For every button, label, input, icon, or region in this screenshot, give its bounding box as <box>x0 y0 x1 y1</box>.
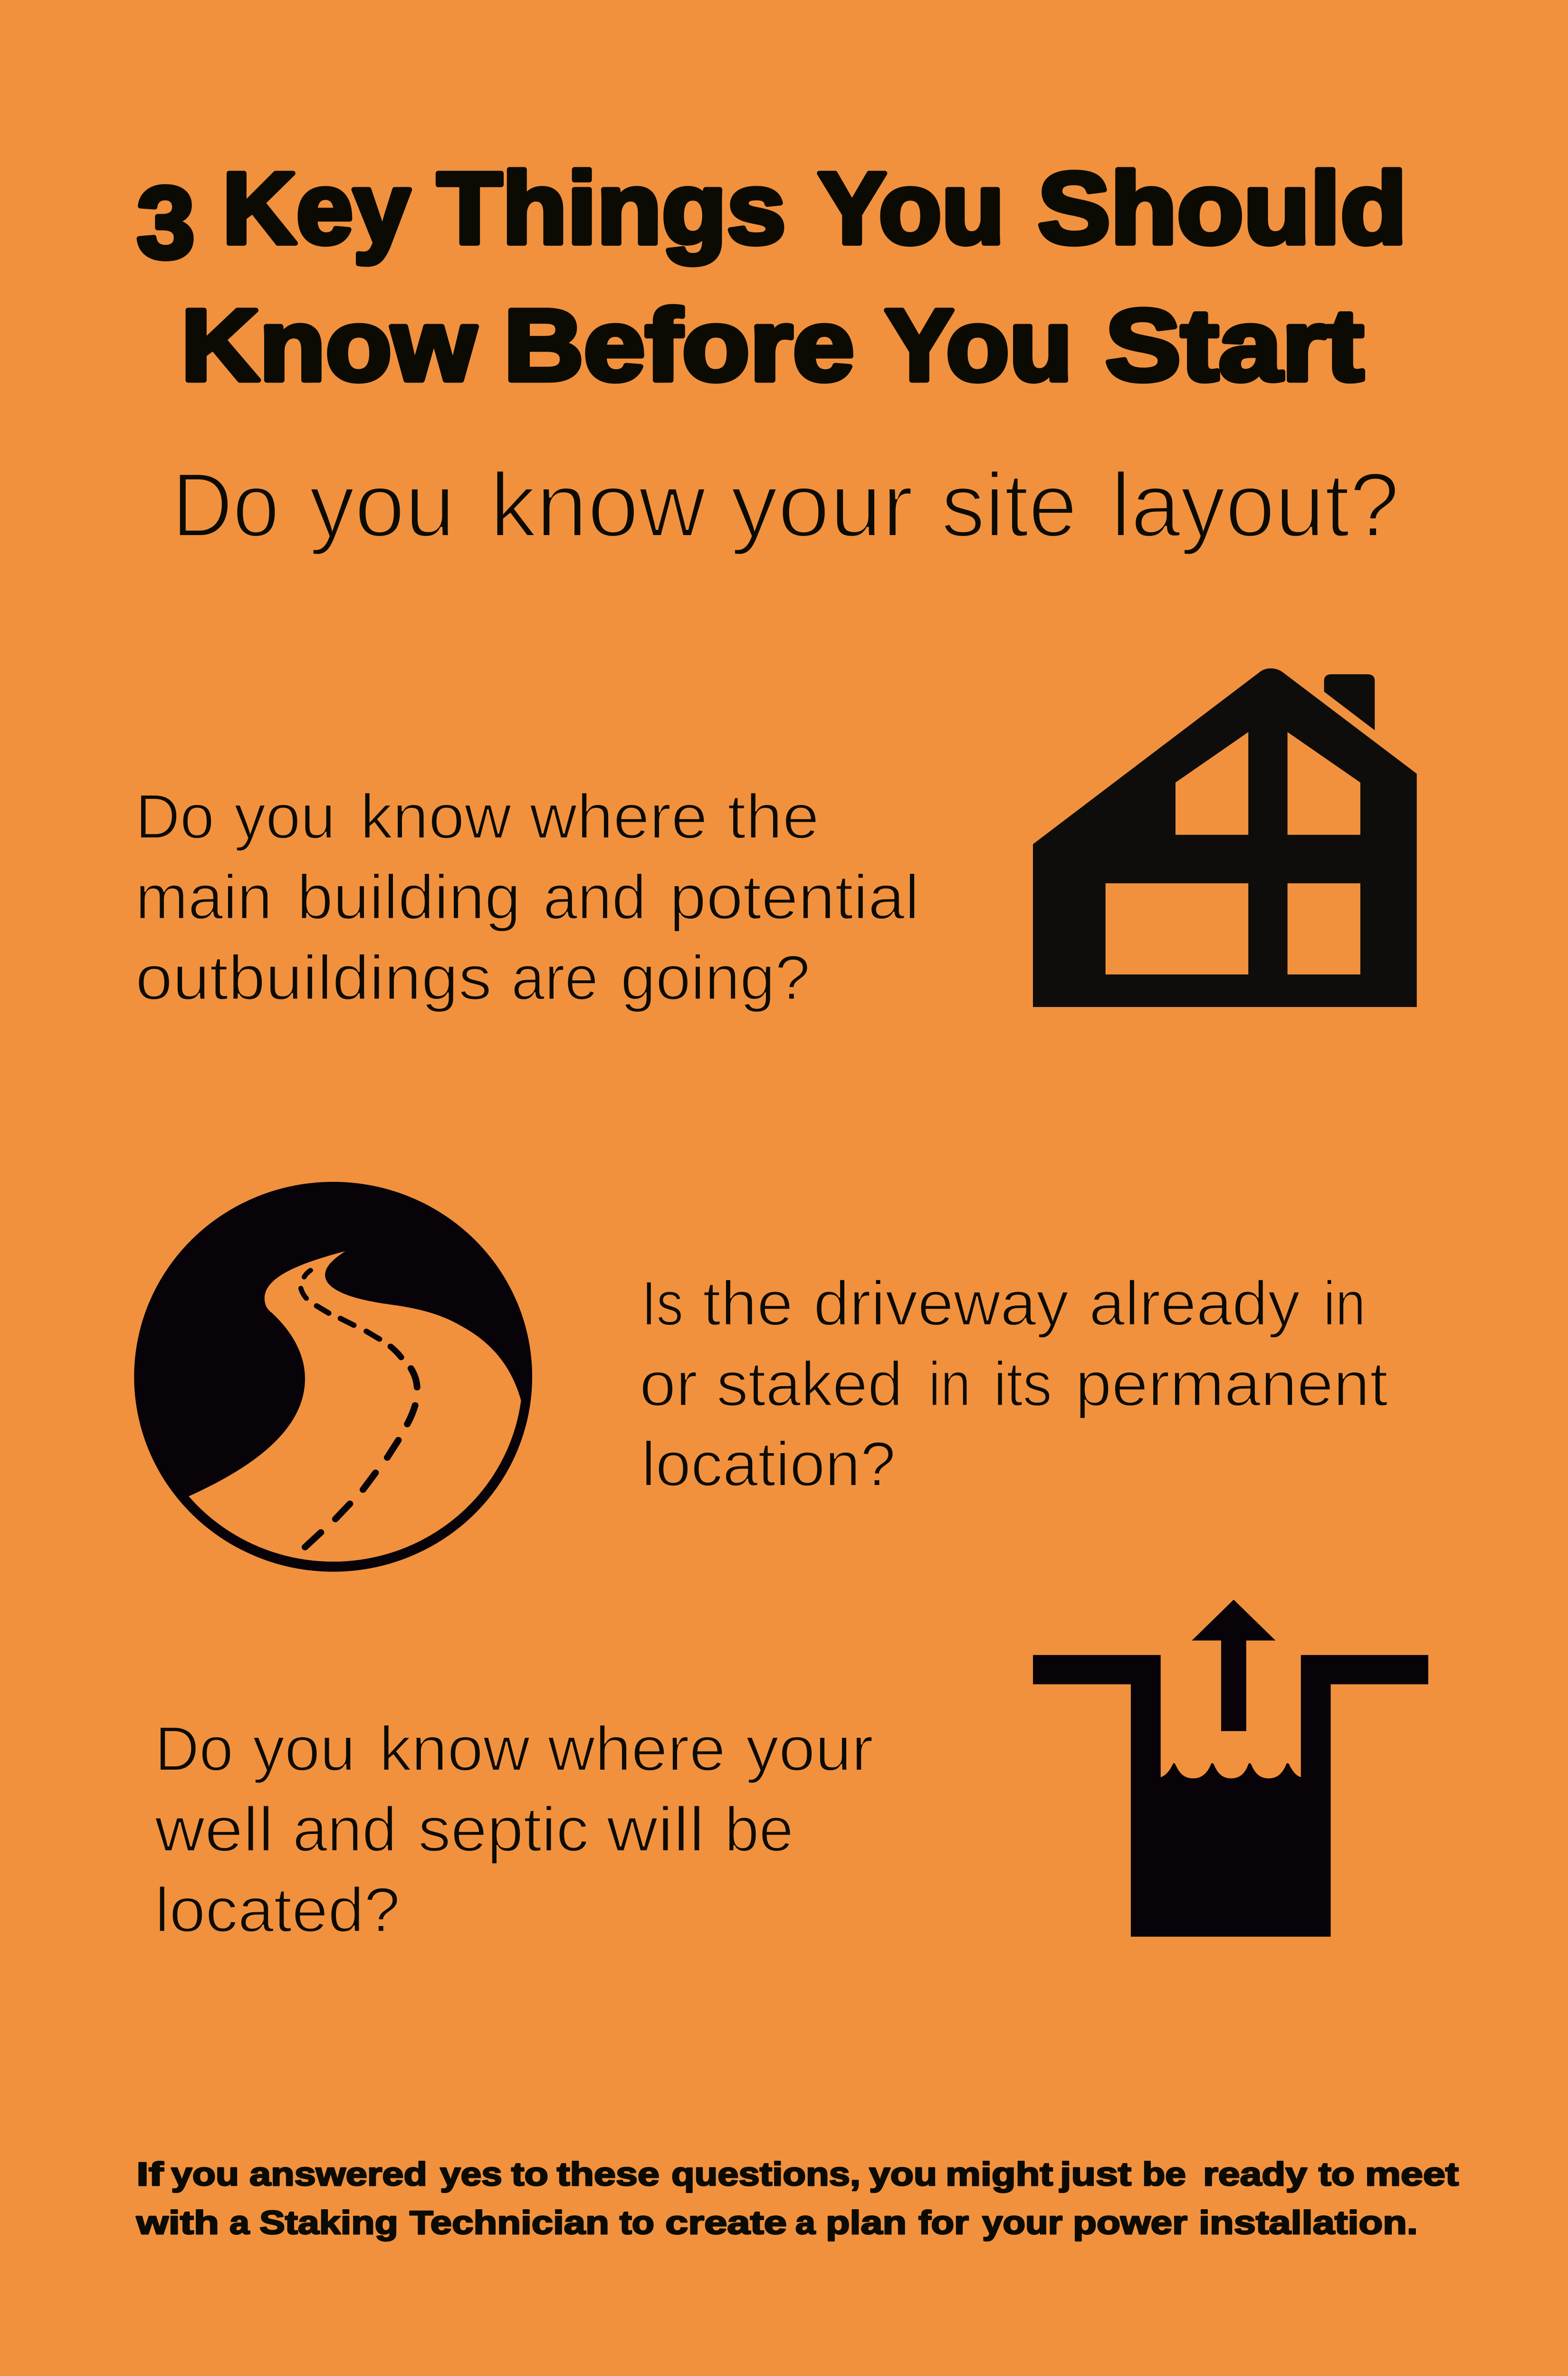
icon: house <box>1033 668 1417 1007</box>
subtitle: Do <box>172 454 279 556</box>
text block: driveway question: permanent <box>1075 1349 1388 1419</box>
title: Things <box>437 152 786 265</box>
closing note: to <box>620 2204 654 2241</box>
subtitle: your <box>731 454 913 556</box>
text block: main building question: are <box>511 943 598 1013</box>
subtitle: site <box>941 454 1077 556</box>
subtitle: know <box>490 454 706 556</box>
title: Know <box>181 288 477 402</box>
text block: main building question: Do <box>135 782 214 852</box>
closing note: meet <box>1365 2156 1459 2193</box>
closing note: just <box>1059 2156 1131 2193</box>
text block: main building question: building <box>297 862 521 932</box>
closing note: ready <box>1203 2156 1307 2193</box>
subtitle <box>172 454 1399 556</box>
text block: driveway question: or <box>640 1349 698 1419</box>
title: Before <box>504 288 854 402</box>
text block: main building question: where <box>529 782 708 852</box>
text block: main building question <box>135 782 919 1013</box>
closing note: plan <box>826 2204 907 2241</box>
text block: driveway question: the <box>703 1268 793 1339</box>
text block: well and septic question: where <box>547 1714 726 1784</box>
text block: well and septic question: and <box>293 1794 397 1865</box>
text block: driveway question: Is <box>641 1268 683 1339</box>
text block: driveway question: in <box>1323 1268 1366 1339</box>
closing note: for <box>918 2204 969 2241</box>
text block: driveway question: location? <box>641 1429 896 1499</box>
closing note: power <box>1073 2204 1187 2241</box>
title <box>137 152 1407 402</box>
closing note: Technician <box>410 2204 609 2241</box>
text block: driveway question: already <box>1089 1268 1300 1339</box>
text block: well and septic question: located? <box>155 1875 400 1945</box>
closing note: create <box>665 2204 787 2241</box>
text block: well and septic question: Do <box>155 1714 233 1784</box>
text block: well and septic question: septic <box>418 1794 589 1865</box>
closing note: questions, <box>671 2156 860 2193</box>
closing note: yes <box>440 2156 502 2193</box>
text block: well and septic question: well <box>154 1794 274 1865</box>
closing note: to <box>511 2156 548 2193</box>
text block: main building question: and <box>543 862 646 932</box>
text block: driveway question: driveway <box>813 1268 1069 1339</box>
text block: well and septic question: your <box>746 1714 873 1784</box>
text block: driveway question: in <box>928 1349 971 1419</box>
text block: main building question: know <box>360 782 511 852</box>
closing note: you <box>171 2156 239 2193</box>
closing note: If <box>136 2156 164 2193</box>
text block: main building question: outbuildings <box>135 943 492 1013</box>
text block: main building question: the <box>727 782 819 852</box>
closing note: your <box>982 2204 1062 2241</box>
title: You <box>818 152 1004 265</box>
icon: well with water and up arrow <box>1033 1600 1428 1937</box>
closing note: answered <box>249 2156 427 2193</box>
text block: well and septic question <box>154 1714 873 1945</box>
text block: driveway question: staked <box>717 1349 903 1419</box>
closing note: be <box>1142 2156 1186 2193</box>
title: Start <box>1105 288 1364 402</box>
text block: well and septic question: will <box>606 1794 705 1865</box>
text block: well and septic question: know <box>379 1714 530 1784</box>
closing note: to <box>1319 2156 1355 2193</box>
title: 3 <box>137 166 195 279</box>
arrow <box>1192 1600 1275 1731</box>
text block: driveway question: its <box>994 1349 1052 1419</box>
title: You <box>885 288 1072 402</box>
closing note: a <box>795 2204 816 2241</box>
text block: well and septic question: be <box>725 1794 794 1865</box>
closing note: Staking <box>259 2204 398 2241</box>
closing note: with <box>136 2204 219 2241</box>
closing note <box>136 2156 1459 2241</box>
text block: main building question: going? <box>621 943 810 1013</box>
subtitle: layout? <box>1111 454 1399 556</box>
subtitle: you <box>309 454 455 556</box>
text block: main building question: main <box>135 862 272 932</box>
closing note: installation. <box>1199 2204 1418 2241</box>
text block: well and septic question: you <box>253 1714 355 1784</box>
closing note: might <box>946 2156 1053 2193</box>
closing note: a <box>229 2204 250 2241</box>
icon: winding driveway <box>134 1182 532 1571</box>
text block: main building question: potential <box>669 862 919 932</box>
title: Key <box>222 152 410 265</box>
title: Should <box>1038 152 1407 265</box>
closing note: these <box>557 2156 660 2193</box>
text block: main building question: you <box>234 782 335 852</box>
text block: driveway question <box>640 1268 1388 1499</box>
closing note: you <box>869 2156 937 2193</box>
